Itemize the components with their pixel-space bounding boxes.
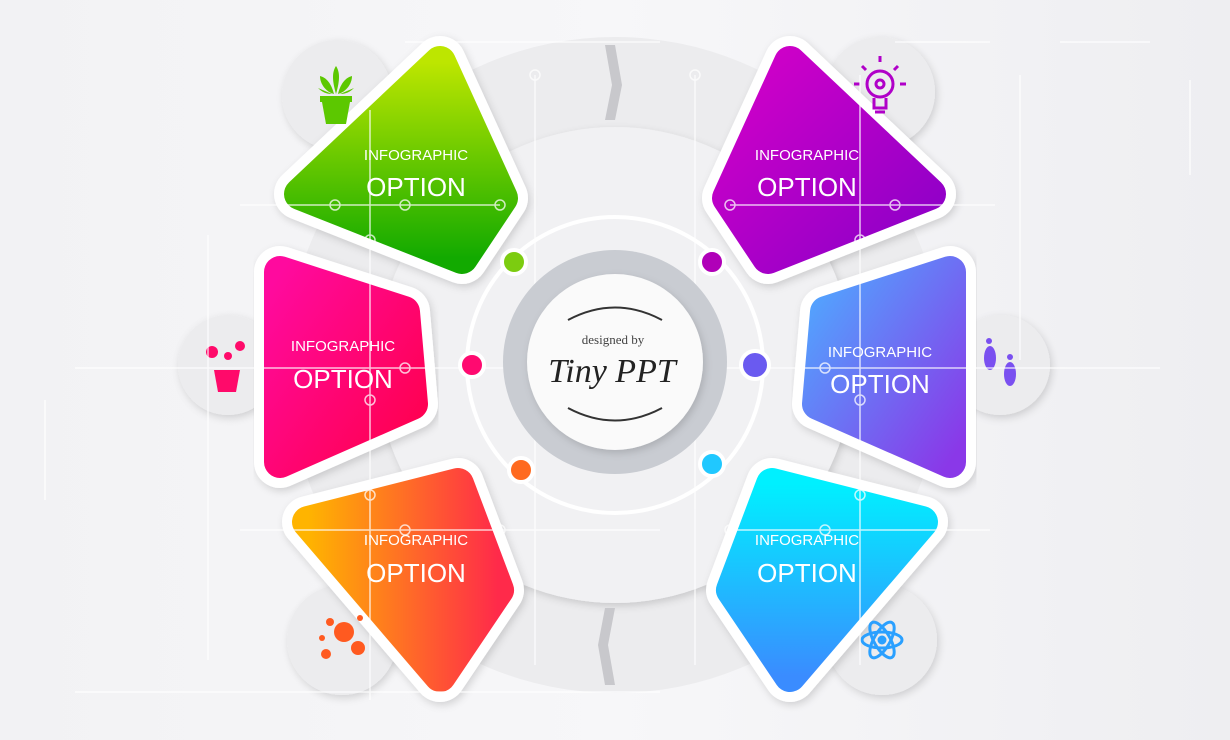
background disk bbox=[287, 37, 943, 693]
option: orange bbox=[308, 484, 498, 676]
option: green bbox=[300, 62, 502, 258]
icon: atom bbox=[862, 619, 902, 661]
option: pink: OPTION bbox=[293, 364, 393, 394]
icon: flowers bbox=[206, 341, 245, 392]
icon circles bbox=[178, 37, 1050, 695]
option: cyan: INFOGRAPHIC bbox=[755, 532, 859, 549]
option: purple: OPTION bbox=[757, 172, 857, 202]
option: blue: OPTION bbox=[830, 369, 930, 399]
option: green: INFOGRAPHIC bbox=[364, 147, 468, 164]
option: green: OPTION bbox=[366, 172, 466, 202]
option: cyan: OPTION bbox=[757, 558, 857, 588]
center logo: designed by bbox=[582, 332, 645, 347]
option: purple bbox=[728, 62, 930, 258]
center logo bbox=[503, 250, 727, 474]
option: purple: INFOGRAPHIC bbox=[755, 147, 859, 164]
option: cyan bbox=[732, 484, 922, 676]
option: blue bbox=[818, 272, 950, 462]
center logo: Tiny PPT bbox=[548, 353, 678, 390]
icon: plant bbox=[318, 66, 354, 124]
dots bbox=[460, 250, 769, 482]
icon: bubbles bbox=[319, 615, 365, 659]
option: pink: INFOGRAPHIC bbox=[291, 338, 395, 355]
option: blue: INFOGRAPHIC bbox=[828, 344, 932, 361]
option: orange: INFOGRAPHIC bbox=[364, 532, 468, 549]
icon: footprints bbox=[984, 338, 1016, 386]
option: pink bbox=[280, 272, 412, 462]
option: orange: OPTION bbox=[366, 558, 466, 588]
icon: bulb bbox=[854, 56, 906, 112]
